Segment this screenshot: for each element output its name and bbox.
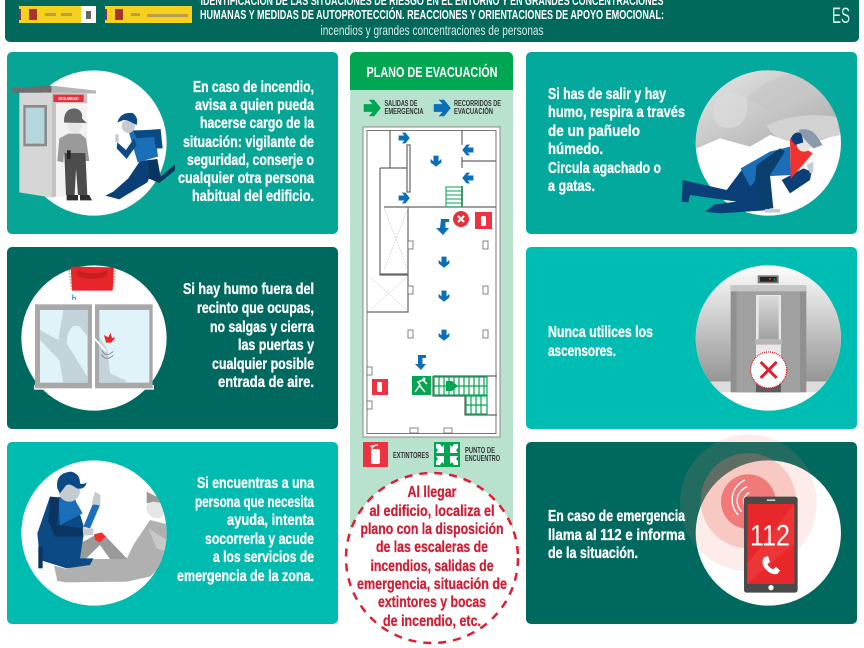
extinguisher sign lower bbox=[372, 379, 388, 395]
legend: extinguishers bbox=[363, 442, 429, 467]
text: ayuda, intenta bbox=[227, 512, 314, 529]
legend: routes: EMERGENCIA bbox=[384, 107, 424, 116]
text: no salgas y cierra bbox=[210, 319, 314, 336]
panel: smoke breathing bbox=[526, 52, 857, 234]
panel: no elevators bbox=[526, 247, 857, 429]
text: Si hay humo fuera del bbox=[183, 281, 314, 298]
plan heading: PLANO DE EVACUACIÓN bbox=[366, 63, 498, 81]
text: Si has de salir y hay bbox=[548, 86, 666, 103]
text: de la situación. bbox=[548, 545, 638, 562]
stairs top bbox=[446, 187, 462, 207]
text: cualquier otra persona bbox=[178, 170, 314, 187]
text bbox=[183, 281, 314, 391]
panel: fire alert bbox=[7, 52, 338, 234]
text bbox=[177, 475, 314, 585]
panel: call 112 bbox=[526, 434, 857, 624]
text: socorrerla y acude bbox=[205, 531, 314, 548]
text bbox=[548, 324, 653, 360]
text: recinto que ocupas, bbox=[197, 300, 314, 317]
legend: meeting point bbox=[434, 442, 500, 467]
text: las puertas y bbox=[238, 337, 314, 354]
title: incendios y grandes concentraciones de personas bbox=[320, 22, 544, 38]
logo: ministry 2 bbox=[105, 6, 192, 23]
title: HUMANAS Y MEDIDAS DE AUTOPROTECCIÓN. REACCIONES Y ORIENTACIONES DE APOYO EMOCIONAL: bbox=[200, 7, 664, 22]
legend: routes: SALIDAS DE bbox=[384, 99, 418, 108]
language code: ES bbox=[832, 3, 850, 28]
callout: on arrival: extintores y bocas bbox=[378, 594, 486, 611]
text: Nunca utilices los bbox=[548, 324, 653, 341]
callout: on arrival bbox=[346, 473, 518, 643]
legend: extinguishers: EXTINTORES bbox=[393, 450, 429, 460]
text: seguridad, conserje o bbox=[187, 152, 314, 169]
text: de un pañuelo bbox=[548, 123, 640, 140]
text: entrada de aire. bbox=[218, 374, 314, 391]
floor plan bbox=[363, 127, 500, 437]
text: a los servicios de bbox=[213, 549, 314, 566]
extinguisher sign upper bbox=[475, 212, 492, 229]
text: cualquier posible bbox=[212, 356, 314, 373]
title bbox=[200, 0, 664, 38]
panel: evacuation plan bbox=[350, 52, 513, 532]
callout: on arrival: incendios, salidas de bbox=[370, 558, 494, 575]
illustration: guard booth and runner bbox=[12, 70, 175, 216]
text: En caso de emergencia bbox=[548, 508, 685, 525]
callout: on arrival: Al llegar bbox=[408, 484, 456, 501]
text: llama al 112 e informa bbox=[548, 527, 685, 544]
illustration: elevator with cross bbox=[693, 263, 843, 411]
evacuation arrows bbox=[399, 133, 473, 370]
text: ascensores. bbox=[548, 343, 616, 360]
panel: smoke outside bbox=[7, 247, 338, 429]
illustration: window and cloth bbox=[21, 265, 167, 411]
illustration: phone ringing 112: 112 bbox=[750, 519, 790, 552]
text bbox=[548, 86, 685, 195]
text: a gatas. bbox=[548, 178, 595, 195]
exit sign bbox=[412, 376, 431, 395]
illustration: crawling person in smoke bbox=[682, 68, 843, 216]
text: emergencia de la zona. bbox=[177, 568, 314, 585]
stairs bottom bbox=[434, 377, 487, 414]
callout: on arrival: de las escaleras de bbox=[376, 539, 488, 556]
callout: on arrival: de incendio, etc. bbox=[383, 613, 481, 630]
header band bbox=[5, 0, 859, 42]
text: situación: vigilante de bbox=[183, 134, 314, 151]
callout: on arrival: al edificio, localiza el bbox=[370, 503, 494, 520]
panel: help someone bbox=[7, 442, 338, 624]
callout: on arrival: plano con la disposición bbox=[360, 521, 504, 538]
legend: meeting point: ENCUENTRO bbox=[465, 453, 500, 463]
no-entry marker bbox=[453, 211, 469, 227]
text: húmedo. bbox=[548, 141, 603, 158]
text: Circula agachado o bbox=[548, 160, 661, 177]
text: habitual del edificio. bbox=[192, 188, 314, 205]
legend: routes: RECORRIDOS DE bbox=[454, 99, 501, 108]
text: hacerse cargo de la bbox=[200, 115, 314, 132]
legend: meeting point: PUNTO DE bbox=[465, 445, 495, 455]
text bbox=[548, 508, 685, 562]
legend: routes bbox=[364, 99, 501, 116]
text: persona que necesita bbox=[195, 494, 314, 511]
plan heading bbox=[350, 52, 513, 90]
legend: routes: EVACUACIÓN bbox=[454, 107, 493, 116]
logo: ministry 1 bbox=[19, 6, 96, 23]
text bbox=[178, 79, 314, 205]
illustration: helper and injured person bbox=[21, 460, 170, 606]
text: avisa a quien pueda bbox=[195, 97, 314, 114]
illustration: guard booth and runner: SEGURIDAD bbox=[58, 96, 79, 102]
text: Si encuentras a una bbox=[197, 475, 314, 492]
illustration: phone ringing 112 bbox=[680, 434, 841, 606]
text: En caso de incendio, bbox=[193, 79, 314, 96]
text: humo, respira a través bbox=[548, 104, 685, 121]
callout: on arrival: emergencia, situación de bbox=[357, 576, 507, 593]
